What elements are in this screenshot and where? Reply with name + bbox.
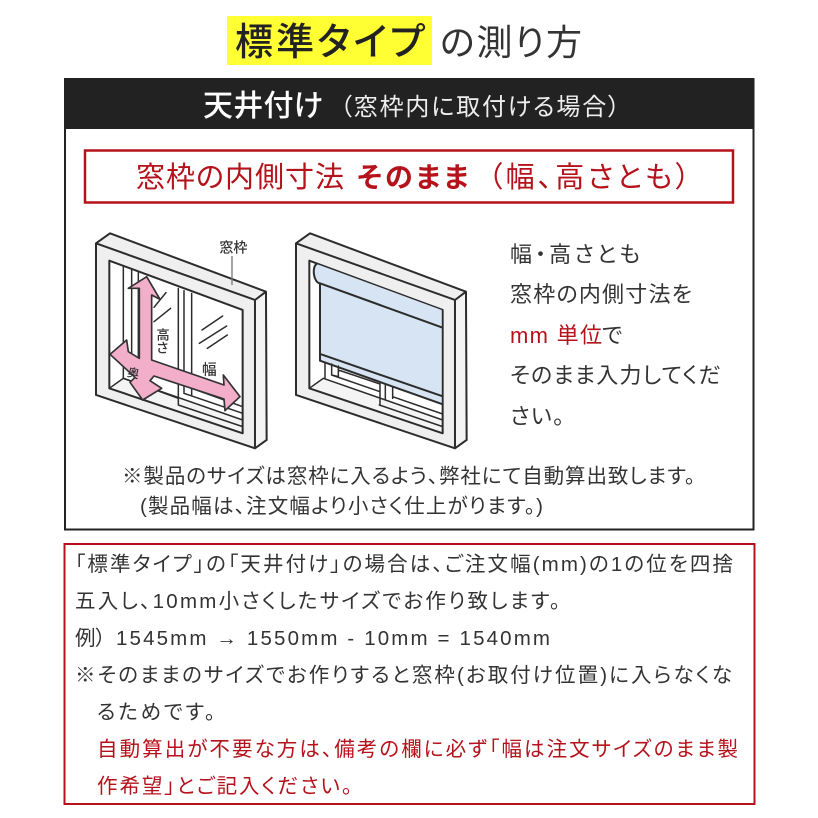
label: frame: 窓枠 <box>219 240 247 256</box>
instruction text: 幅・高さとも <box>510 242 640 267</box>
blind fabric <box>314 264 442 404</box>
red callout <box>85 150 733 202</box>
label: height: 高 <box>156 326 170 342</box>
label: width: 幅 <box>202 362 217 379</box>
instruction text <box>510 242 721 429</box>
instruction text: mm 単位 <box>510 323 602 348</box>
product size note: ※製品のサイズは窓枠に入るよう、弊社にて自動算出致します。 <box>122 465 695 488</box>
note line 3: example calculation: 1545mm → 1550mm - 10mm = 1540mm <box>116 627 550 650</box>
red callout: そのまま <box>357 162 469 193</box>
instruction text: 窓枠の内側寸法を <box>510 282 692 307</box>
note line 3: example: 例） <box>75 627 106 650</box>
title highlight <box>227 16 432 65</box>
red callout: （幅、高さとも） <box>488 161 690 194</box>
title <box>227 16 582 65</box>
title keyword: 標準タイプ <box>235 22 426 64</box>
note line 2: 五入し、10mm小さくしたサイズでお作り致します。 <box>75 590 560 613</box>
panel subheading: （窓枠内に取付ける場合） <box>340 94 620 121</box>
instruction text: で <box>602 323 622 348</box>
panel heading: 天井付け <box>203 90 323 123</box>
window diagram: measuring width and height <box>96 233 267 448</box>
note line 4: ※そのままのサイズでお作りすると窓枠(お取付け位置)に入らなくな <box>75 664 732 687</box>
panel: rounding note <box>64 544 754 804</box>
instruction text: そのまま入力してくだ <box>510 363 721 388</box>
instruction text: さい。 <box>510 404 564 429</box>
window diagram: fitted roller blind <box>296 233 467 448</box>
title suffix: の測り方 <box>440 22 582 63</box>
icon: pink measuring arrows <box>110 277 240 411</box>
window diagram: measuring width and height: さ <box>156 341 168 356</box>
panel border <box>65 79 754 530</box>
panel header bar <box>65 79 754 129</box>
panel: ceiling mount <box>65 79 754 530</box>
product size note <box>122 465 695 518</box>
product size note: (製品幅は、注文幅より小さく仕上がります。) <box>140 495 543 518</box>
red callout: 窓枠の内側寸法 <box>136 161 344 194</box>
label: depth: 奥 <box>126 364 141 381</box>
note line 6: red: 自動算出が不要な方は、備考の欄に必ず「幅は注文サイズのまま製 <box>97 738 738 761</box>
note line 1: 「標準タイプ」の「天井付け」の場合は、ご注文幅(mm)の1の位を四捨 <box>75 553 734 576</box>
note line 7: red: 作希望」とご記入ください。 <box>97 775 352 798</box>
note line 5: るためです。 <box>97 701 215 724</box>
note border <box>64 544 754 804</box>
